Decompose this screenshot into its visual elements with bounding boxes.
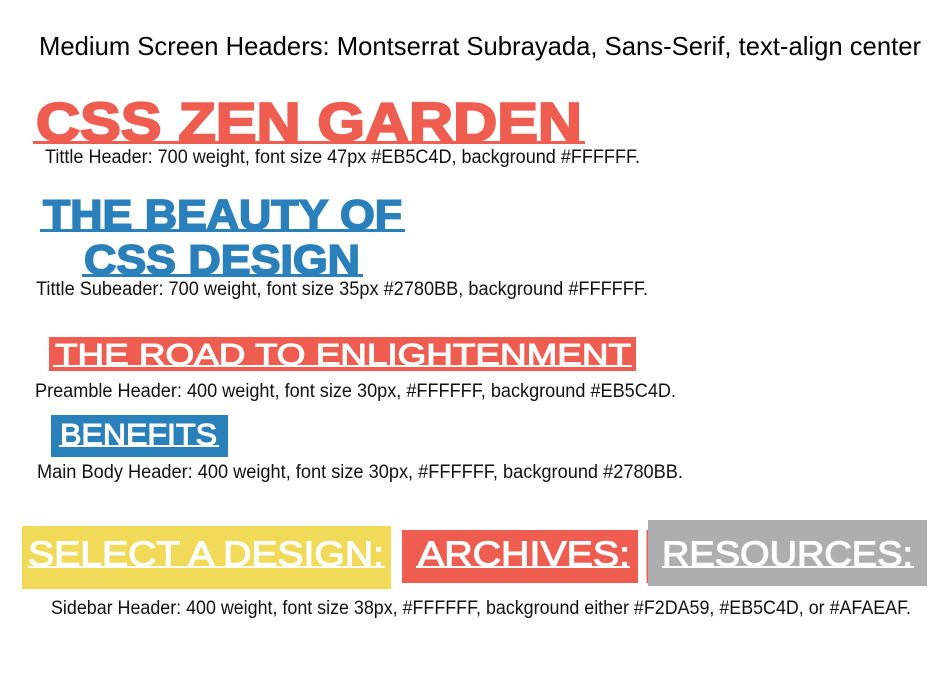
preamble header caption: Preamble Header: 400 weight, font size 30px, #FFFFFF, background #EB5C4D. <box>35 381 676 402</box>
title subheader caption: Tittle Subeader: 700 weight, font size 35px #2780BB, background #FFFFFF. <box>36 279 648 300</box>
sidebar header: archives <box>402 530 638 583</box>
preamble header sample: THE ROAD TO ENLIGHTENMENT <box>55 337 631 372</box>
sidebar header: select a design: SELECT A DESIGN: <box>28 535 384 574</box>
sidebar header caption: Sidebar Header: 400 weight, font size 38px, #FFFFFF, background either #F2DA59, #EB5C4D, or #AFAEAF. <box>51 598 911 619</box>
title subheader sample: THE BEAUTY OF <box>43 191 402 238</box>
sidebar header: archives: ARCHIVES: <box>418 535 630 574</box>
title header caption: Tittle Header: 700 weight, font size 47px #EB5C4D, background #FFFFFF. <box>45 147 640 168</box>
sidebar header: select a design <box>22 526 391 589</box>
title subheader sample <box>40 191 405 283</box>
main body header caption: Main Body Header: 400 weight, font size 30px, #FFFFFF, background #2780BB. <box>37 462 683 483</box>
sidebar header: resources <box>646 520 927 586</box>
title header sample: CSS ZEN GARDEN <box>36 91 582 153</box>
main body header sample: BENEFITS <box>60 417 217 452</box>
title subheader sample: CSS DESIGN <box>84 236 360 283</box>
sidebar header: resources: RESOURCES: <box>662 535 913 574</box>
page heading: Medium Screen Headers: Montserrat Subrayada, Sans-Serif, text-align center <box>39 31 921 61</box>
